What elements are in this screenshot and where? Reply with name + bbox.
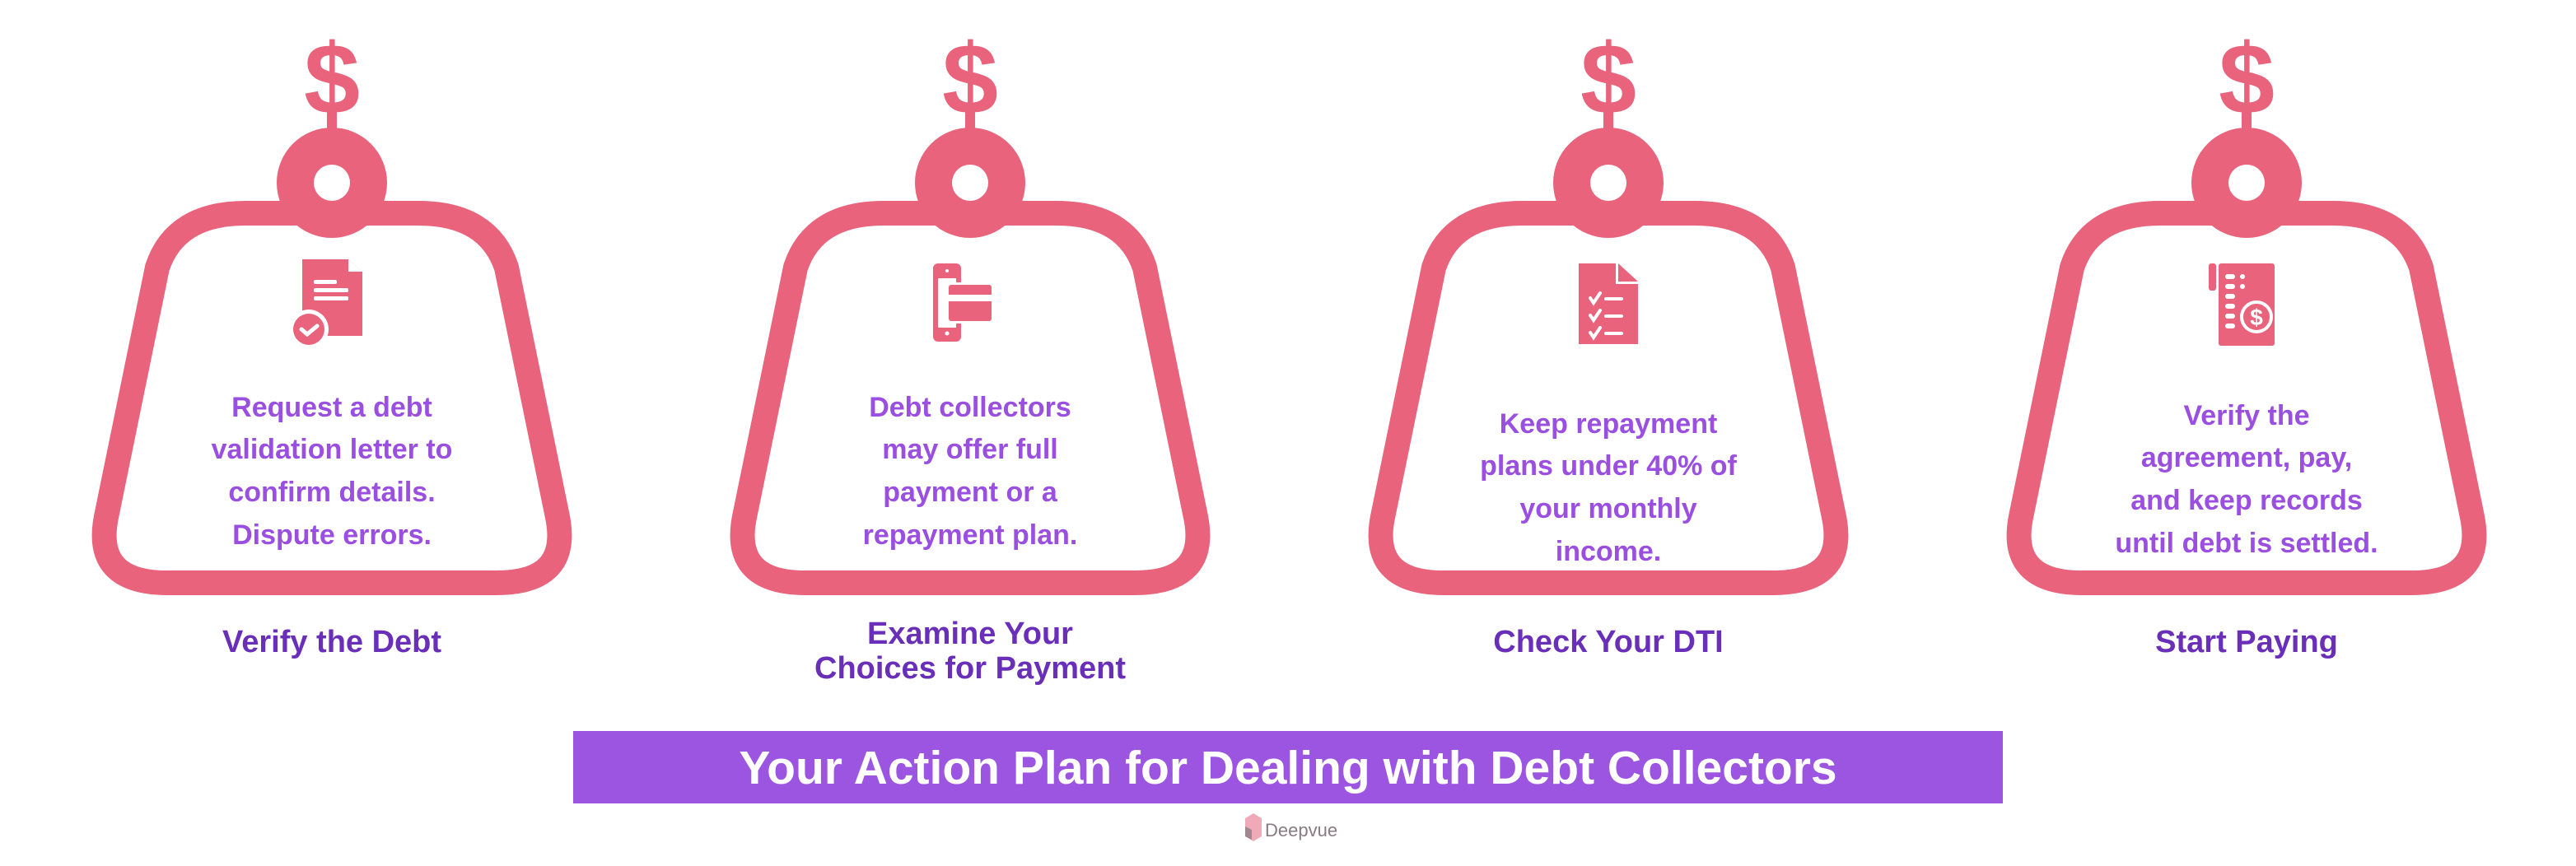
label: examine your choices: Choices for Payment <box>814 651 1126 686</box>
text: verify description: confirm details. <box>228 477 436 508</box>
text: verify description: Dispute errors. <box>232 519 432 551</box>
panel: verify the debt <box>105 23 559 659</box>
logo: Deepvue: Deepvue <box>1265 820 1337 840</box>
title banner <box>573 731 2003 803</box>
text: verify description: validation letter to <box>212 434 452 465</box>
label: start paying: Start Paying <box>2155 625 2338 659</box>
label: verify the debt: Verify the Debt <box>222 625 441 659</box>
icon: document with check <box>289 259 362 349</box>
text: paying description: until debt is settled. <box>2115 528 2378 559</box>
text: paying description: Verify the <box>2183 400 2310 431</box>
panel: start paying <box>2019 23 2474 659</box>
icon: phone with card <box>933 263 992 342</box>
text: examine description: payment or a <box>883 477 1058 508</box>
label: examine your choices: Examine Your <box>867 617 1073 651</box>
icon: receipt with coin <box>2209 263 2275 346</box>
icon: receipt with coin: $ <box>2250 305 2263 330</box>
text: examine description: repayment plan. <box>863 519 1077 551</box>
text: DTI description: income. <box>1556 536 1661 567</box>
icon: checklist document <box>1579 263 1638 344</box>
text: DTI description: Keep repayment <box>1500 408 1717 440</box>
text: verify description: Request a debt <box>231 392 432 423</box>
text: examine description: may offer full <box>882 434 1058 465</box>
panel: examine choices <box>743 23 1197 686</box>
panel: check your DTI <box>1381 23 1836 659</box>
text: DTI description: plans under 40% of <box>1480 450 1738 482</box>
title banner: Your Action Plan for Dealing with Debt Collectors <box>739 742 1837 794</box>
text: DTI description: your monthly <box>1519 493 1697 524</box>
text: examine description: Debt collectors <box>869 392 1071 423</box>
label: check your DTI: Check Your DTI <box>1493 625 1724 659</box>
logo: Deepvue <box>1245 813 1337 841</box>
text: paying description: agreement, pay, <box>2141 442 2352 473</box>
text: paying description: and keep records <box>2130 485 2363 516</box>
